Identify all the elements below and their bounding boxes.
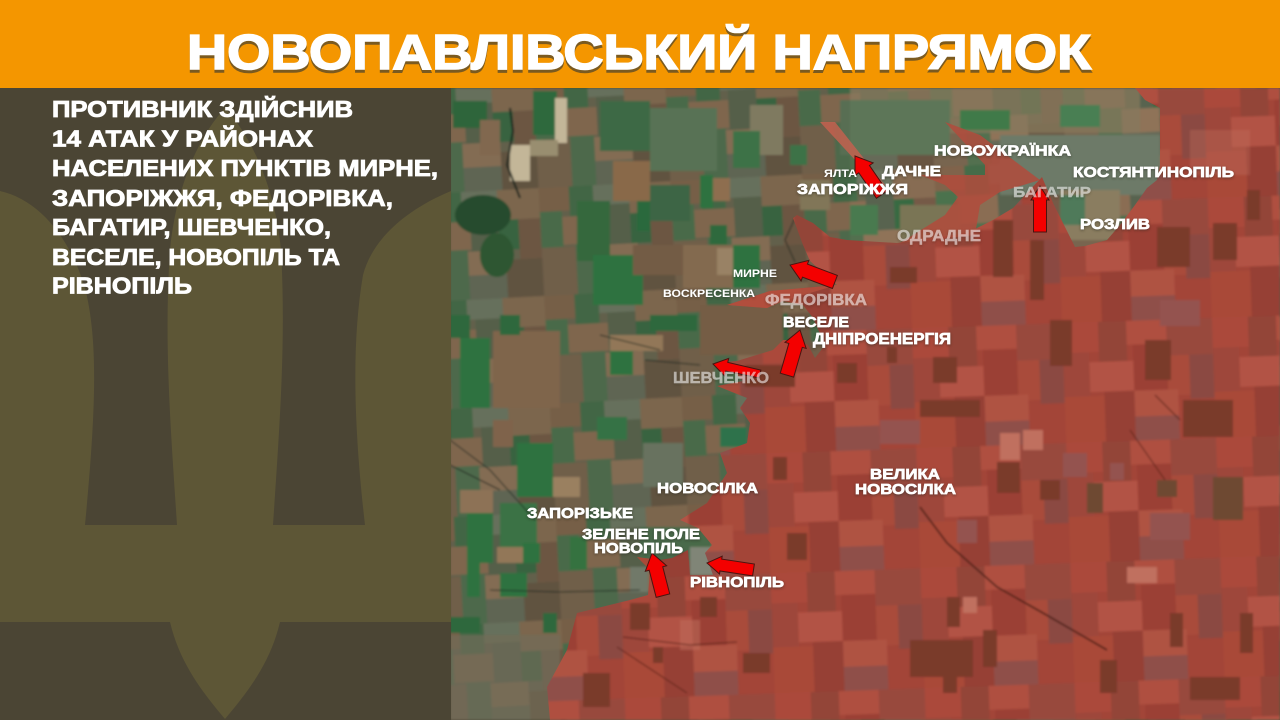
occupied territory overlay: [547, 88, 1280, 720]
label: Новоукраїнка: НОВОУКРАЇНКА: [934, 142, 1071, 160]
label: Рівнопіль: РІВНОПІЛЬ: [690, 575, 784, 591]
label: Розлив: РОЗЛИВ: [1080, 217, 1150, 233]
label: Дніпроенергія: ДНІПРОЕНЕРГІЯ: [813, 331, 951, 348]
summary text: ВЕСЕЛЕ, НОВОПІЛЬ ТА: [52, 244, 340, 270]
arrow: Мирне: [786, 255, 839, 292]
trident emblem: [0, 108, 451, 719]
label: Одрадне: ОДРАДНЕ: [897, 228, 981, 245]
label: Новосілка: НОВОСІЛКА: [657, 481, 759, 497]
label: Запоріжжя: ЗАПОРІЖЖЯ: [797, 181, 908, 198]
summary text: ЗАПОРІЖЖЯ, ФЕДОРІВКА,: [52, 185, 393, 211]
label: Багатир: БАГАТИР: [1013, 184, 1091, 201]
label: Веселе: ВЕСЕЛЕ: [783, 314, 849, 331]
summary text: НАСЕЛЕНИХ ПУНКТІВ МИРНЕ,: [52, 155, 438, 181]
label: Дачне: ДАЧНЕ: [882, 163, 941, 180]
title: НОВОПАВЛІВСЬКИЙ НАПРЯМОК: [187, 28, 1091, 83]
left panel: [0, 88, 451, 720]
label: Воскресенка: ВОСКРЕСЕНКА: [663, 288, 755, 300]
label: Новосілка (Велика): НОВОСІЛКА: [855, 482, 957, 498]
arrow: Веселе: [776, 327, 811, 378]
label: Костянтинопіль: КОСТЯНТИНОПІЛЬ: [1073, 164, 1234, 181]
label: Федорівка: ФЕДОРІВКА: [765, 292, 867, 309]
summary text: ПРОТИВНИК ЗДІЙСНИВ: [52, 95, 353, 122]
arrow: Багатир: [1031, 186, 1049, 232]
summary text: БАГАТИР, ШЕВЧЕНКО,: [52, 214, 331, 240]
contested wedge: Дачне to Багатир: [900, 122, 1040, 243]
map panel: [450, 88, 1280, 720]
map labels: [527, 142, 1234, 591]
label: Новопіль: НОВОПІЛЬ: [594, 540, 683, 557]
label: Шевченко: ШЕВЧЕНКО: [673, 370, 769, 387]
arrow: Рівнопіль: [706, 554, 755, 579]
label: Велика: ВЕЛИКА: [870, 467, 941, 483]
arrow: Новопіль: [641, 550, 674, 598]
arrow: Ялта: [846, 150, 891, 201]
arrow: Шевченко: [711, 355, 762, 384]
summary text: 14 АТАК У РАЙОНАХ: [52, 124, 314, 152]
summary text: [52, 95, 438, 298]
satellite fields (unoccupied territory): [450, 88, 1280, 720]
label: Запорізьке: ЗАПОРІЗЬКЕ: [527, 505, 633, 522]
label: Зелене Поле: ЗЕЛЕНЕ ПОЛЕ: [582, 526, 700, 543]
label: Ялта: ЯЛТА: [824, 168, 857, 180]
contested wedge: Федорівка: [727, 285, 837, 308]
contested wedge: Запоріжжя: [820, 122, 885, 195]
label: Мирне: МИРНЕ: [733, 268, 777, 280]
title: НОВОПАВЛІВСЬКИЙ НАПРЯМОК: [187, 25, 1091, 80]
summary text: РІВНОПІЛЬ: [52, 272, 192, 298]
header banner: [0, 0, 1280, 88]
